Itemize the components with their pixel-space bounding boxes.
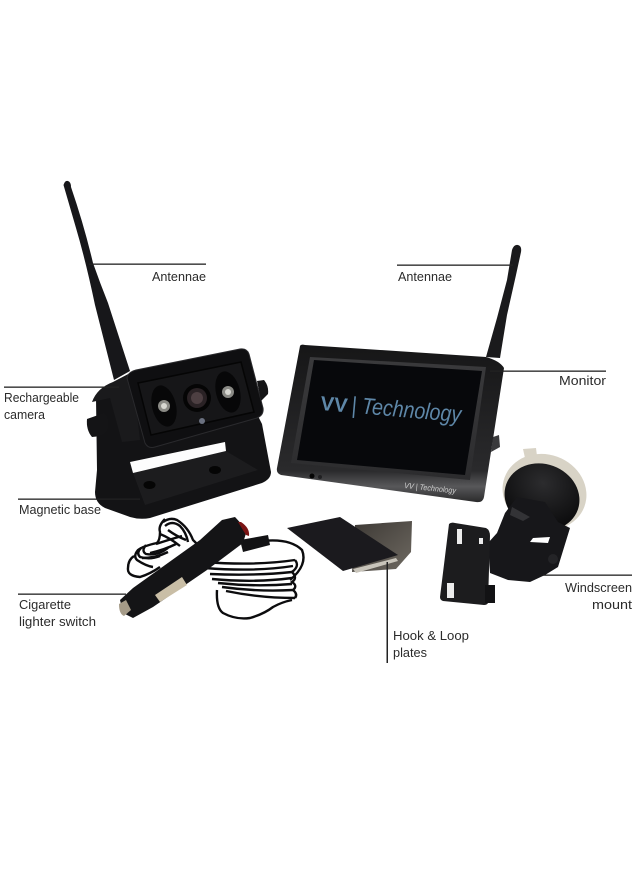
plate light edge xyxy=(353,558,398,573)
label: Rechargeable xyxy=(4,390,79,405)
windscreen mount xyxy=(440,442,597,605)
pivot bolt xyxy=(548,554,558,564)
callout: antennae monitor xyxy=(397,264,513,284)
sensor dot xyxy=(199,418,205,424)
logo wordmark: | Technology xyxy=(350,392,464,427)
suction cup dome xyxy=(495,453,589,541)
leader line xyxy=(490,370,606,372)
camera antenna xyxy=(64,181,130,380)
right adjustment knob xyxy=(257,380,268,401)
leader line xyxy=(397,264,513,266)
label: Antennae xyxy=(398,269,452,284)
strain relief xyxy=(240,535,270,552)
monitor stand stub xyxy=(491,435,500,452)
label: Monitor xyxy=(559,373,607,388)
camera face panel xyxy=(138,362,254,435)
label: Windscreen xyxy=(565,580,632,595)
arm highlight xyxy=(510,507,530,521)
label: Antennae xyxy=(152,269,206,284)
monitor screen xyxy=(297,360,482,475)
grey adhesive plate xyxy=(352,521,412,572)
leader line xyxy=(18,594,126,595)
bracket screw holes xyxy=(144,466,221,489)
camera bracket xyxy=(95,390,271,519)
label: Hook & Loop xyxy=(393,628,469,643)
suction cup rim xyxy=(492,442,597,542)
callout: windscreen mount xyxy=(543,574,632,612)
label: Cigarette xyxy=(19,597,71,612)
monitor bezel xyxy=(291,357,486,480)
leader line xyxy=(543,574,632,576)
callout: magnetic base xyxy=(18,498,140,517)
suction tab xyxy=(523,448,537,458)
plate slots xyxy=(447,529,483,598)
cable coils xyxy=(128,519,304,618)
power button and sensor xyxy=(310,474,322,479)
leader line xyxy=(18,498,140,500)
black hook pad xyxy=(287,517,398,571)
mount arm xyxy=(488,497,570,582)
mounting plate xyxy=(440,523,490,605)
callout: hook and loop plates xyxy=(386,562,469,663)
callout: rechargeable camera xyxy=(4,386,119,422)
arm gap xyxy=(530,537,550,543)
monitor antenna xyxy=(486,245,521,358)
hook and loop plates xyxy=(287,517,412,573)
label: camera xyxy=(4,407,46,422)
camera housing xyxy=(127,349,263,448)
label: lighter switch xyxy=(19,614,96,629)
leader line xyxy=(89,264,206,265)
left infrared lens xyxy=(147,383,181,429)
bezel logo: VV | Technology xyxy=(404,481,457,496)
left adjustment knob xyxy=(87,413,108,437)
callout: cigarette lighter switch xyxy=(18,594,126,629)
camera back housing xyxy=(92,372,140,442)
camera assembly xyxy=(64,181,271,519)
center camera lens xyxy=(183,384,211,412)
label: mount xyxy=(592,597,632,612)
label: plates xyxy=(393,645,427,660)
plug side clip xyxy=(155,577,187,602)
power cable xyxy=(119,517,304,618)
red indicator xyxy=(238,522,249,536)
bracket opening xyxy=(130,442,226,473)
screen logo xyxy=(320,389,464,427)
label: Magnetic base xyxy=(19,502,101,517)
callout: antennae camera xyxy=(89,264,206,284)
monitor casing xyxy=(277,345,504,502)
leader line xyxy=(386,562,388,663)
monitor assembly xyxy=(277,245,521,502)
logo mark: VV xyxy=(320,393,349,417)
bracket inner shelf xyxy=(133,451,258,505)
plug metal tip xyxy=(119,600,131,616)
callout: monitor xyxy=(490,370,607,388)
plug body xyxy=(120,517,247,618)
mount lower knob xyxy=(485,585,495,603)
right infrared lens xyxy=(211,369,245,415)
leader line xyxy=(4,386,119,388)
